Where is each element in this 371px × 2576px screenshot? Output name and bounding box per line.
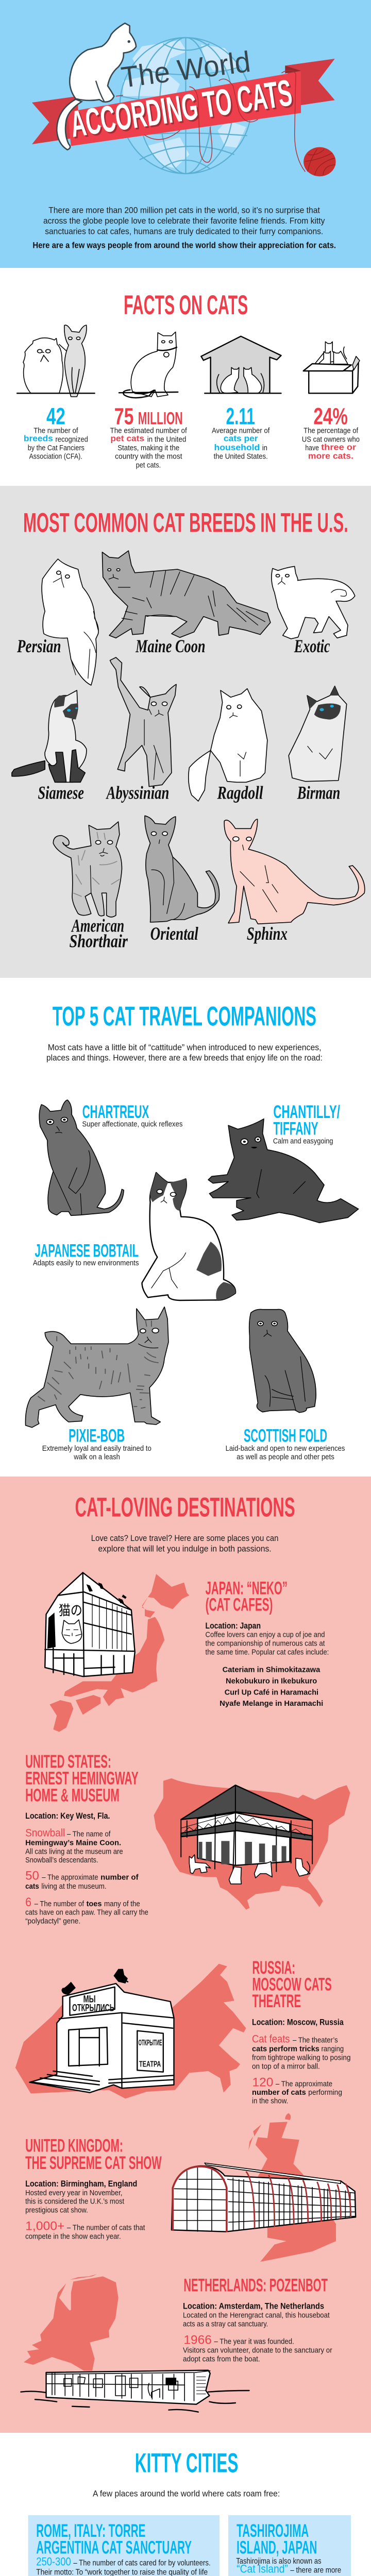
cat: american shorthair bbox=[53, 822, 122, 917]
cat: japanese bobtail bbox=[142, 1173, 235, 1300]
text: united kingdom bbox=[25, 2136, 162, 2241]
panel: facts on cats: MILLION bbox=[138, 409, 182, 428]
text: united states hemingway bbox=[25, 1752, 148, 1925]
text: chartreux bbox=[82, 1102, 182, 1128]
panel: facts on cats bbox=[17, 290, 360, 469]
text: russia moscow cats theatre bbox=[252, 1958, 351, 2105]
text: united kingdom: this is considered the U.K.’s most bbox=[25, 2197, 124, 2206]
text: chantilly tiffany: Calm and easygoing bbox=[273, 1137, 333, 1145]
icon: house with two cats bbox=[201, 336, 281, 393]
icon: moscow cats theatre: ОТКРЫЛИСЬ bbox=[72, 2002, 114, 2013]
stat: 2.11 cats per household: Average number of bbox=[212, 426, 270, 435]
panel: cat-loving destinations: THE SUPREME CAT SHOW bbox=[25, 2153, 162, 2173]
text: japan neko: Location: Japan bbox=[206, 1621, 261, 1631]
intro text bbox=[32, 206, 336, 250]
panel: tashirojima: Tashirojima is also known as bbox=[236, 2556, 322, 2565]
panel: tashirojima: “Cat Island” bbox=[237, 2562, 288, 2575]
text: united states hemingway: Snowball’s descendants. bbox=[25, 1856, 98, 1864]
label: siamese: Siamese bbox=[38, 783, 84, 803]
stat: 42 breeds: The number of bbox=[33, 426, 78, 435]
icon: supreme cat show hall bbox=[172, 2163, 356, 2232]
text: united kingdom: Hosted every year in November, bbox=[25, 2189, 122, 2197]
label: american shorthair: American bbox=[71, 916, 124, 936]
text: united states hemingway: “polydactyl” gene. bbox=[25, 1917, 80, 1925]
label: persian: Persian bbox=[16, 636, 61, 656]
stat: 24 percent bbox=[302, 403, 360, 461]
title: The World: The World bbox=[120, 45, 252, 94]
cat: siamese bbox=[12, 690, 87, 782]
stat: 2.11 cats per household: cats per bbox=[224, 434, 258, 444]
label: maine coon: Maine Coon bbox=[136, 636, 206, 656]
text: united states hemingway: Hemingway’s Maine Coon. bbox=[25, 1838, 121, 1847]
banner text bbox=[68, 72, 296, 147]
intro: destinations: Love cats? Love travel? Here are some places you can bbox=[91, 1534, 278, 1543]
text: united kingdom: Location: Birmingham, England bbox=[25, 2179, 137, 2189]
text: russia moscow cats theatre: – The approximate bbox=[276, 2079, 332, 2088]
stat: 2.11 cats per household: 2.11 bbox=[226, 403, 255, 429]
text: japanese bobtail bbox=[33, 1241, 139, 1267]
cat: birman bbox=[289, 686, 347, 782]
text: united kingdom: prestigious cat show. bbox=[25, 2206, 88, 2214]
text: united states hemingway: Location: Key West, Fla. bbox=[25, 1811, 110, 1821]
stat: 75 million: country with the most bbox=[115, 452, 182, 461]
stat: 75 million: in the United bbox=[147, 435, 186, 444]
icon: cats in a box bbox=[303, 342, 360, 393]
stat: 2.11 cats per household: in bbox=[262, 444, 267, 452]
icon: sitting cat with collar bbox=[119, 332, 178, 398]
cat: pixie-bob bbox=[25, 1307, 168, 1428]
panel: kitty cities bbox=[28, 2453, 351, 2576]
text: united states hemingway: All cats living at the museum are bbox=[25, 1847, 123, 1856]
icon: fluffy cat and sphynx bbox=[17, 325, 95, 397]
panel: top 5 travel companions: JAPANESE BOBTAIL bbox=[35, 1241, 139, 1261]
text: japanese bobtail: Adapts easily to new environments bbox=[33, 1259, 139, 1267]
stat: 75 million: pet cats bbox=[110, 434, 144, 444]
text: japan neko: Curl Up Café in Haramachi bbox=[225, 1688, 318, 1697]
text: pixie-bob: PIXIE-BOB bbox=[69, 1426, 125, 1446]
panel: rome: 250-300 bbox=[36, 2555, 71, 2568]
map: united states bbox=[154, 1778, 350, 1910]
text: united states hemingway: 6 bbox=[25, 1895, 31, 1909]
stat: 42 breeds bbox=[24, 403, 88, 461]
icon: globe bbox=[120, 38, 251, 174]
text: russia moscow cats theatre: RUSSIA: bbox=[252, 1958, 295, 1978]
text: japan neko: Cateriam in Shimokitazawa bbox=[223, 1665, 321, 1674]
panel: hero bbox=[0, 0, 371, 268]
intro: destinations bbox=[91, 1534, 278, 1554]
text: japan neko: Nyafe Melange in Haramachi bbox=[220, 1699, 323, 1707]
stat: 75 million: 75 bbox=[114, 403, 133, 429]
text: russia moscow cats theatre: number of cats bbox=[252, 2088, 306, 2096]
icon: moscow cats theatre: ТЕАТРА bbox=[139, 2060, 161, 2069]
text: russia moscow cats theatre: THEATRE bbox=[252, 1991, 301, 2011]
stat: 2.11 cats per household: household bbox=[214, 443, 260, 452]
stat: 42 breeds: recognized bbox=[55, 435, 88, 444]
stat: 75 million: The estimated number of bbox=[110, 426, 187, 435]
text: netherlands pozenbot: adopt cats from the boat. bbox=[183, 2354, 260, 2363]
text: united states hemingway: Snowball bbox=[25, 1827, 65, 1839]
label: american shorthair: Shorthair bbox=[70, 931, 128, 952]
text: japan neko bbox=[206, 1579, 329, 1707]
text: russia moscow cats theatre: performing bbox=[308, 2088, 342, 2096]
stat: 42 breeds: Association (CFA). bbox=[29, 452, 82, 461]
text: united states hemingway: HOME & MUSEUM bbox=[25, 1786, 120, 1806]
panel: cat-loving destinations: ERNEST HEMINGWAY bbox=[25, 1769, 139, 1789]
text: united kingdom: UNITED KINGDOM: bbox=[25, 2136, 123, 2156]
stat: 42 breeds: by the Cat Fanciers bbox=[28, 444, 85, 452]
stat: 2.11 cats per household bbox=[212, 403, 270, 461]
text: netherlands pozenbot bbox=[183, 2276, 332, 2363]
text: chartreux: Super affectionate, quick reflexes bbox=[82, 1120, 182, 1128]
label: american shorthair bbox=[70, 916, 128, 952]
text: united states hemingway: – The name of bbox=[67, 1829, 111, 1838]
icon: hemingway house with cats bbox=[181, 1785, 312, 1884]
text: netherlands pozenbot: 1966 bbox=[183, 2333, 212, 2347]
cat: abyssinian bbox=[110, 657, 176, 787]
text: japan neko: Nekobukuro in Ikebukuro bbox=[226, 1676, 317, 1685]
cat: maine coon bbox=[102, 551, 271, 638]
text: russia moscow cats theatre: – The theater’s bbox=[293, 2036, 338, 2044]
cat: oriental bbox=[145, 816, 220, 922]
map: russia bbox=[15, 1964, 246, 2098]
text: chantilly tiffany bbox=[273, 1102, 340, 1145]
panel: kitty cities: KITTY CITIES bbox=[135, 2448, 238, 2478]
cat: chartreux bbox=[39, 1100, 124, 1215]
map: netherlands bbox=[24, 2274, 119, 2371]
panel: tashirojima bbox=[228, 2515, 351, 2576]
icon: moscow cats theatre bbox=[29, 1969, 174, 2093]
panel: most common cat breeds bbox=[0, 486, 371, 978]
cat: exotic bbox=[272, 566, 355, 639]
cat: sphinx bbox=[224, 819, 365, 924]
text: united states hemingway: cats have on each paw. They all carry the bbox=[25, 1908, 148, 1917]
icon: cat cafe building: 猫の bbox=[59, 1603, 82, 1618]
panel: rome: – The number of cats cared for by volunteers. bbox=[73, 2558, 211, 2567]
cat: scottish fold bbox=[249, 1309, 316, 1413]
text: pixie-bob: walk on a leash bbox=[74, 1452, 120, 1461]
label: exotic: Exotic bbox=[294, 636, 330, 656]
stat: 75 million: States, making it the bbox=[117, 444, 179, 452]
text: russia moscow cats theatre: in the show. bbox=[252, 2096, 288, 2105]
cat: ragdoll bbox=[189, 689, 267, 801]
icon: white cat bbox=[57, 23, 136, 150]
text: united states hemingway: – The number of bbox=[35, 1900, 84, 1908]
text: netherlands pozenbot: – The year it was founded. bbox=[214, 2337, 294, 2346]
label: abyssinian: Abyssinian bbox=[106, 783, 169, 803]
stat: 24 percent: three or bbox=[321, 443, 356, 452]
text: united states hemingway: many of the bbox=[104, 1900, 140, 1908]
text: russia moscow cats theatre: 120 bbox=[252, 2076, 273, 2089]
panel: top 5 travel companions bbox=[25, 1002, 359, 1461]
icon: houseboat bbox=[21, 2370, 249, 2412]
text: japan neko: (CAT CAFES) bbox=[206, 1595, 273, 1615]
ribbon banner bbox=[32, 59, 335, 146]
icon: cat cafe building bbox=[45, 1572, 135, 1676]
icon: moscow cats theatre: МЫ bbox=[83, 1993, 96, 2005]
icon: moscow cats theatre: ОТКРЫТИЕ bbox=[139, 2038, 162, 2047]
text: russia moscow cats theatre: Cat feats bbox=[252, 2033, 290, 2045]
stat: 75 million: pet cats. bbox=[136, 461, 161, 469]
panel: cat-loving destinations bbox=[0, 1477, 371, 2433]
text: netherlands pozenbot: acts as a stray cat sanctuary. bbox=[183, 2319, 268, 2328]
panel: rome bbox=[28, 2515, 220, 2576]
text: united states hemingway: UNITED STATES: bbox=[25, 1752, 111, 1772]
stat: 2.11 cats per household: the United States. bbox=[214, 452, 268, 461]
label: ragdoll: Ragdoll bbox=[217, 783, 263, 803]
text: united states hemingway: living at the museum. bbox=[41, 1882, 107, 1890]
icon: yarn ball and thread bbox=[116, 70, 336, 176]
map: japan bbox=[49, 1574, 189, 1732]
panel: rome: ROME, ITALY: TORRE bbox=[36, 2521, 145, 2541]
label: oriental: Oriental bbox=[150, 923, 198, 944]
cat: chantilly tiffany bbox=[208, 1119, 359, 1223]
text: united kingdom: 1,000+ bbox=[25, 2219, 64, 2233]
stat: 42 breeds: 42 bbox=[46, 403, 65, 429]
text: united states hemingway: number of bbox=[100, 1873, 139, 1882]
text: united states hemingway: – The approximate bbox=[42, 1873, 98, 1882]
text: russia moscow cats theatre: cats perform tricks bbox=[252, 2044, 319, 2053]
text: russia moscow cats theatre: on top of a mirror ball. bbox=[252, 2062, 320, 2071]
text: chartreux: CHARTREUX bbox=[82, 1102, 149, 1122]
text: pixie-bob bbox=[42, 1426, 151, 1461]
text: russia moscow cats theatre: ranging bbox=[322, 2044, 344, 2053]
stat: 24 percent: more cats. bbox=[308, 452, 353, 461]
cat: persian bbox=[42, 559, 98, 685]
text: united states hemingway: toes bbox=[87, 1900, 102, 1908]
panel: tashirojima: – there are more bbox=[290, 2565, 341, 2574]
label: sphinx: Sphinx bbox=[247, 923, 288, 944]
text: united states hemingway: cats bbox=[25, 1882, 39, 1890]
map: united kingdom bbox=[248, 2113, 336, 2262]
intro: travel bbox=[46, 1043, 323, 1063]
intro: kitty cities: A few places around the world where cats roam free: bbox=[93, 2489, 280, 2499]
stat: 24 percent: have bbox=[305, 444, 319, 452]
stat: 42 breeds: breeds bbox=[24, 434, 53, 444]
stat: 75 million bbox=[110, 403, 187, 469]
text: scottish fold bbox=[226, 1426, 345, 1461]
intro: destinations: explore that will let you indulge in both passions. bbox=[98, 1545, 272, 1554]
text: pixie-bob: Extremely loyal and easily trained to bbox=[42, 1444, 151, 1452]
text: united kingdom: – The number of cats that bbox=[67, 2223, 145, 2232]
text: united states hemingway: 50 bbox=[25, 1869, 39, 1883]
text: united kingdom: compete in the show each year. bbox=[25, 2232, 121, 2241]
